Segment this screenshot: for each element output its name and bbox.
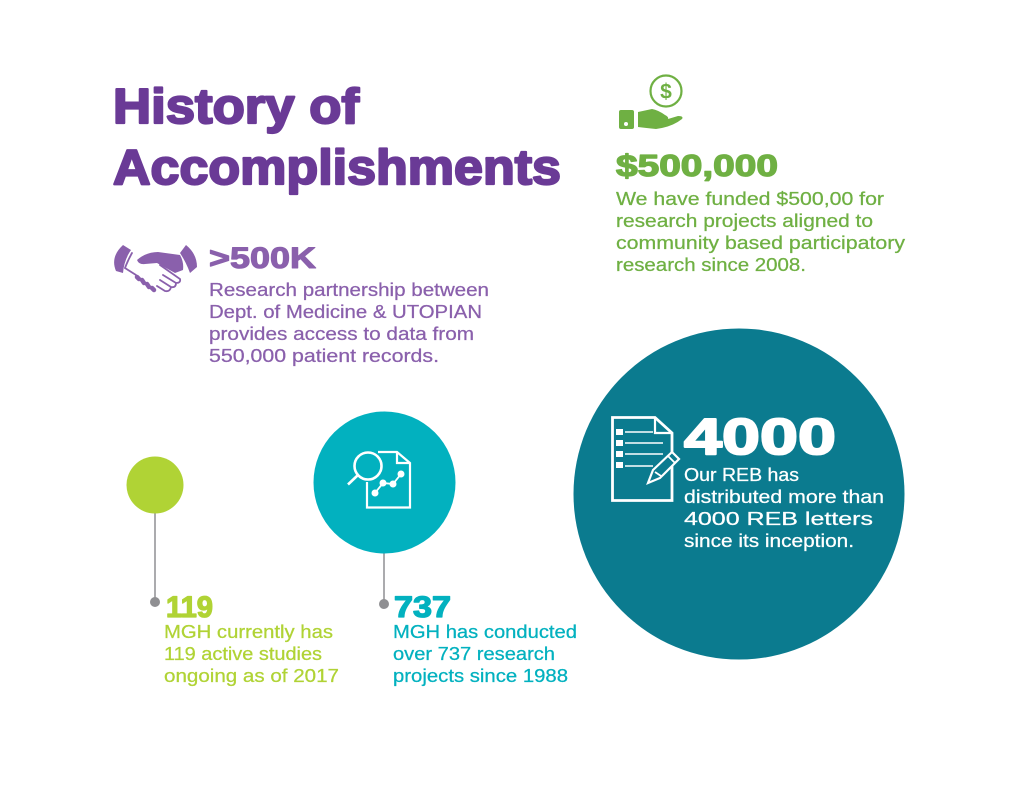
text: patient records description: Research partnership between [209,280,489,300]
teal circle [314,412,456,554]
icon: magnifier and chart document [348,452,410,508]
panel: REB letters [574,328,904,660]
text: REB description: distributed more than [684,487,884,507]
heading: 737: 737 [394,591,451,624]
panel: active studies [126,456,339,686]
connector dot [150,597,160,607]
connector dot [379,599,389,609]
text: REB description: Our REB has [684,465,799,485]
text: funding description: We have funded $500,00 for [616,189,884,209]
text: funding description: research since 2008. [616,255,806,275]
text: projects description: MGH has conducted [393,622,577,642]
title: Accomplishments [113,141,561,195]
heading: 4000: 4000 [684,408,836,465]
text: projects description [393,622,577,686]
panel: patient records [114,242,489,366]
text: funding description [616,189,905,275]
text: patient records description: Dept. of Medicine & UTOPIAN [209,302,482,322]
text: patient records description: provides access to data from [209,324,474,344]
text: studies description: ongoing as of 2017 [164,666,339,686]
lime circle [126,456,184,514]
connector line [383,552,385,604]
text: studies description [164,622,339,686]
icon: document with pencil [612,418,679,500]
heading: >500K: >500K [209,242,316,275]
connector line [154,512,156,602]
text: REB description: since its inception. [684,531,854,551]
icon: handshake [114,245,197,291]
text: funding description: community based participatory [616,233,905,253]
text: projects description: over 737 research [393,644,555,664]
text: studies description: 119 active studies [164,644,322,664]
text: REB description: 4000 REB letters [684,509,873,529]
icon: hand with dollar coin: $ [660,80,672,104]
heading: $500,000: $500,000 [616,148,778,183]
text: projects description: projects since 1988 [393,666,568,686]
title: History of [113,80,360,134]
text: patient records description [209,280,489,366]
title [113,80,561,195]
icon: hand with dollar coin [619,76,682,129]
text: funding description: research projects aligned to [616,211,873,231]
large teal circle [574,328,904,660]
heading: 119: 119 [166,591,213,624]
text: studies description: MGH currently has [164,622,333,642]
panel: research projects [314,412,577,686]
panel: funding [616,76,905,275]
text: REB description [684,465,884,551]
text: patient records description: 550,000 patient records. [209,346,439,366]
